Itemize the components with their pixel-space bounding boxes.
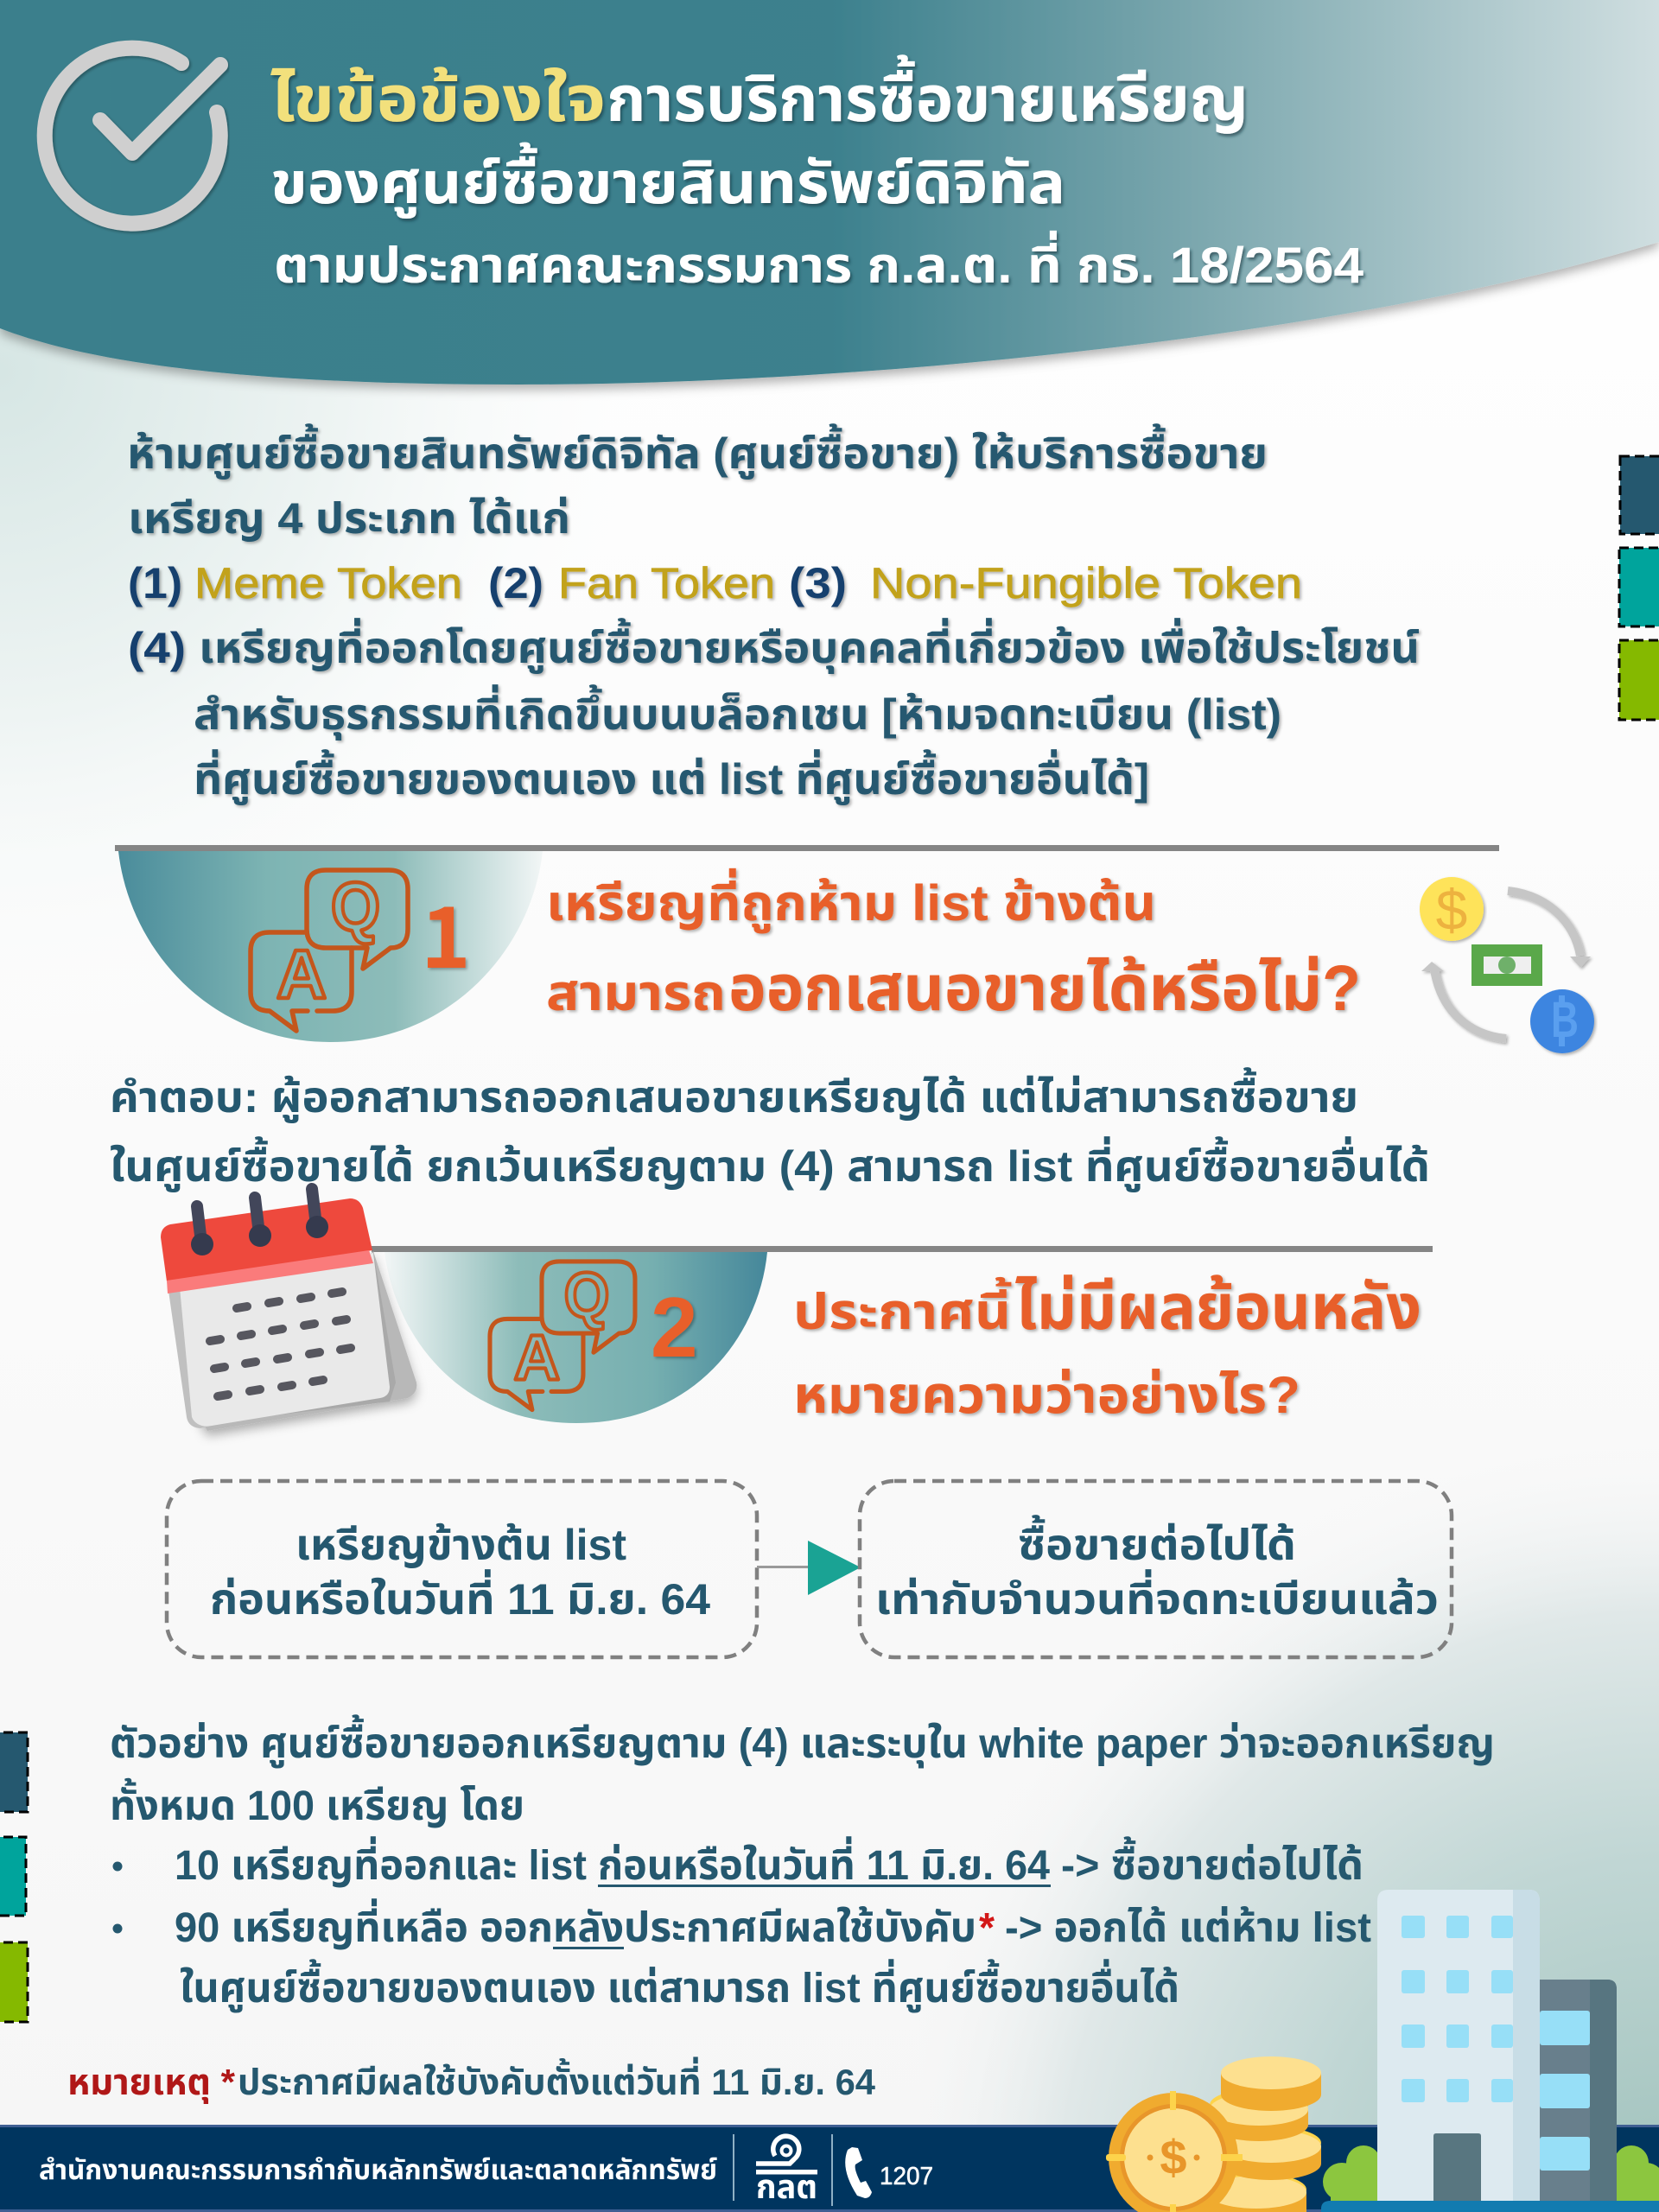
body example text: ทั้งหมด 100 เหรียญ โดย bbox=[110, 1778, 524, 1829]
question 1 heading: ออกเสนอขายได้หรือไม่? bbox=[728, 952, 1361, 1024]
intro text block: (1) bbox=[128, 559, 182, 607]
body example text: -> ออกได้ แต่ห้าม list bbox=[1005, 1905, 1371, 1951]
icon: coin exchange: $ bbox=[1436, 878, 1467, 942]
intro text block: เหรียญที่ออกโดยศูนย์ซื้อขายหรือบุคคลที่เกี่ยวข้อง เพื่อใช้ประโยชน์ bbox=[199, 618, 1420, 674]
header banner bbox=[0, 0, 1659, 385]
body example text: 90 เหรียญที่เหลือ ออก bbox=[175, 1898, 553, 1951]
intro text block: Fan Token bbox=[558, 559, 775, 607]
building and bushes illustration bbox=[1321, 1890, 1659, 2212]
body example text: หลัง bbox=[553, 1905, 624, 1951]
title: ไขข้อข้องใจ bbox=[270, 63, 606, 135]
question 2 heading: หมายความว่าอย่างไร? bbox=[793, 1366, 1300, 1424]
body example text: * bbox=[979, 1905, 995, 1951]
box: left: เหรียญข้างต้น list bbox=[296, 1521, 626, 1569]
body example text: ประกาศมีผลใช้บังคับ bbox=[624, 1905, 976, 1951]
body example text: ตัวอย่าง ศูนย์ซื้อขายออกเหรียญตาม (4) และระบุใน white paper ว่าจะออกเหรียญ bbox=[110, 1714, 1495, 1769]
answer text: ในศูนย์ซื้อขายได้ ยกเว้นเหรียญตาม (4) สามารถ list ที่ศูนย์ซื้อขายอื่นได้ bbox=[110, 1136, 1430, 1192]
arrow bbox=[757, 1541, 861, 1595]
intro text block bbox=[127, 423, 1420, 805]
footer bar: 1207 bbox=[880, 2163, 933, 2190]
icon: Q and A bubbles 2: A bbox=[514, 1322, 560, 1394]
question 2 heading: ประกาศนี้ bbox=[793, 1276, 1012, 1340]
question 1 heading: เหรียญที่ถูกห้าม list ข้างต้น bbox=[546, 868, 1156, 934]
intro text block: (3) bbox=[789, 559, 847, 607]
footer bar: สำนักงานคณะกรรมการกำกับหลักทรัพย์และตลาดหลักทรัพย์ bbox=[39, 2154, 717, 2185]
coin: dollar: $ bbox=[1160, 2130, 1187, 2184]
intro text block: ห้ามศูนย์ซื้อขายสินทรัพย์ดิจิทัล (ศูนย์ซื้อขาย) ให้บริการซื้อขาย bbox=[127, 423, 1268, 480]
title: ของศูนย์ซื้อขายสินทรัพย์ดิจิทัล bbox=[270, 142, 1065, 219]
footnote bbox=[67, 2056, 876, 2104]
intro text block: Non-Fungible Token bbox=[870, 559, 1302, 607]
icon: coin exchange: B bbox=[1551, 992, 1579, 1048]
icon: Q and A bubbles 1: A bbox=[276, 936, 327, 1013]
divider 2 bbox=[372, 1246, 1433, 1252]
icon: check mark circle bbox=[45, 48, 220, 224]
intro text block: ที่ศูนย์ซื้อขายของตนเอง แต่ list ที่ศูนย์ซื้อขายอื่นได้] bbox=[194, 749, 1149, 805]
body example text: ก่อนหรือในวันที่ 11 มิ.ย. 64 bbox=[598, 1836, 1050, 1889]
title: การบริการซื้อขายเหรียญ bbox=[607, 54, 1249, 135]
question 2 heading bbox=[793, 1271, 1421, 1424]
swatches: left edge bbox=[0, 1732, 28, 2022]
body example text: 10 เหรียญที่ออกและ list bbox=[175, 1836, 587, 1889]
icon: Q and A bubbles 1 bbox=[251, 868, 408, 1031]
title bbox=[270, 54, 1363, 294]
question 1 heading: สามารถ bbox=[546, 965, 726, 1021]
question 2 heading: ไม่มีผลย้อนหลัง bbox=[1015, 1271, 1421, 1343]
intro text block: (4) bbox=[128, 624, 186, 672]
coins stack bbox=[1206, 2056, 1321, 2212]
title: ตามประกาศคณะกรรมการ ก.ล.ต. ที่ กธ. 18/2564 bbox=[274, 230, 1363, 294]
box: right: ซื้อขายต่อไปได้ bbox=[1018, 1515, 1296, 1569]
intro text block: เหรียญ 4 ประเภท ได้แก่ bbox=[128, 494, 570, 543]
box: left: ก่อนหรือในวันที่ 11 มิ.ย. 64 bbox=[210, 1569, 710, 1624]
half circle 1 bbox=[118, 851, 543, 1042]
half circle 2 bbox=[385, 1252, 767, 1423]
box: left bbox=[167, 1481, 757, 1657]
body example text: ในศูนย์ซื้อขายของตนเอง แต่สามารถ list ที่ศูนย์ซื้อขายอื่นได้ bbox=[180, 1959, 1179, 2013]
icon: calendar bbox=[161, 1189, 416, 1431]
icon: phone bbox=[845, 2147, 872, 2198]
footnote: หมายเหตุ * bbox=[67, 2062, 236, 2104]
divider 1 bbox=[115, 845, 1499, 851]
box: right bbox=[860, 1481, 1452, 1657]
intro text block: (2) bbox=[488, 559, 543, 607]
swatches: right edge bbox=[1619, 456, 1659, 720]
answer text bbox=[110, 1067, 1430, 1192]
logo: SEC bbox=[756, 2136, 817, 2206]
icon: Q and A bubbles 1: Q bbox=[331, 868, 380, 945]
coin: dollar bbox=[1106, 2091, 1243, 2212]
intro text block: Meme Token bbox=[194, 559, 462, 607]
icon: Q and A bubbles 2 bbox=[490, 1260, 635, 1410]
intro text block: สำหรับธุรกรรมที่เกิดขึ้นบนบล็อกเชน [ห้ามจดทะเบียน (list) bbox=[194, 684, 1281, 741]
answer text: คำตอบ: ผู้ออกสามารถออกเสนอขายเหรียญได้ แต่ไม่สามารถซื้อขาย bbox=[110, 1067, 1358, 1123]
number 2: 2 bbox=[651, 1280, 698, 1375]
icon: Q and A bubbles 2: Q bbox=[564, 1260, 609, 1332]
box: right: เท่ากับจำนวนที่จดทะเบียนแล้ว bbox=[875, 1569, 1439, 1624]
body example text: -> ซื้อขายต่อไปได้ bbox=[1061, 1836, 1363, 1889]
footer bar bbox=[0, 2125, 1659, 2212]
question 1 heading bbox=[546, 868, 1361, 1024]
number 1: 1 bbox=[421, 870, 471, 993]
logo: SEC: กลต bbox=[756, 2170, 817, 2206]
footnote: ประกาศมีผลใช้บังคับตั้งแต่วันที่ 11 มิ.ย. 64 bbox=[238, 2056, 876, 2102]
body example text bbox=[110, 1714, 1495, 2013]
icon: coin exchange bbox=[1420, 877, 1594, 1053]
